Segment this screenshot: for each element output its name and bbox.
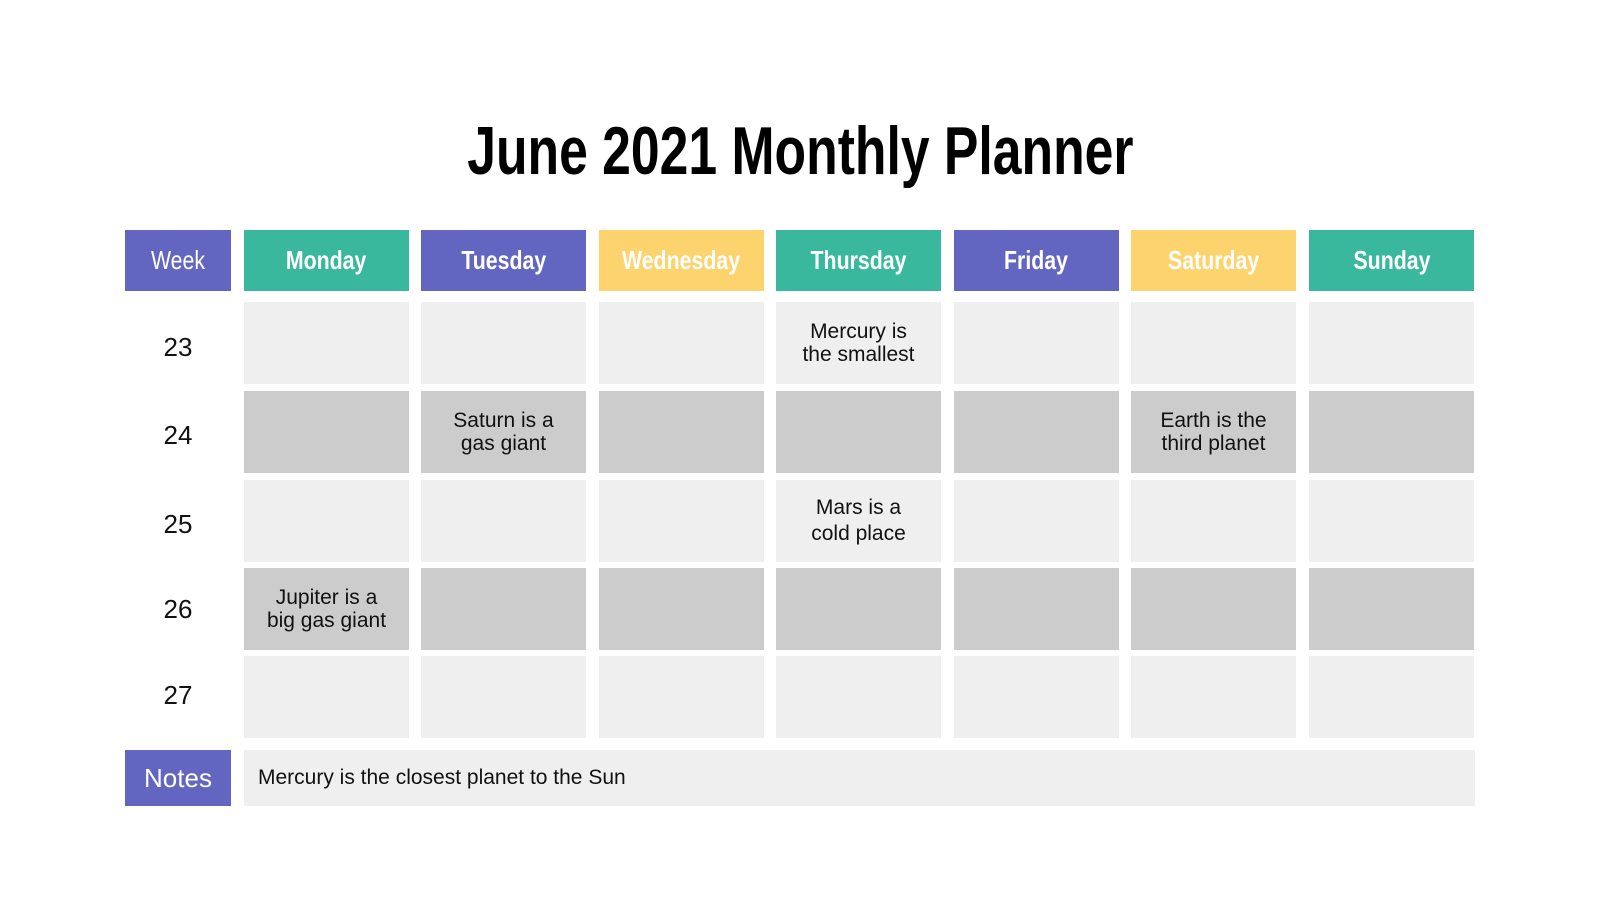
title: June 2021 Monthly Planner — [467, 113, 1133, 189]
cell: saturn: Saturn is a — [453, 409, 554, 432]
header: saturday — [1131, 230, 1296, 291]
cell: earth — [1131, 391, 1296, 473]
cell: earth: third planet — [1162, 432, 1265, 455]
notes label — [125, 750, 231, 806]
row 23 cells — [244, 302, 1474, 384]
header: monday — [244, 230, 409, 291]
header: tuesday — [421, 230, 586, 291]
notes text — [244, 750, 1475, 806]
row 25 cells — [244, 480, 1474, 562]
header: sunday — [1309, 230, 1474, 291]
header: tuesday: Tuesday — [461, 245, 546, 275]
cell: mercury: the smallest — [802, 343, 915, 366]
header: week — [125, 230, 231, 291]
header: thursday — [776, 230, 941, 291]
cell: mercury: Mercury is — [810, 320, 907, 343]
week 23 label: 23 — [164, 332, 192, 362]
header: sunday: Sunday — [1353, 245, 1430, 275]
week 27 label: 27 — [164, 680, 192, 710]
cell: saturn — [421, 391, 586, 473]
cell: earth: Earth is the — [1160, 409, 1267, 432]
week 24 label: 24 — [164, 420, 192, 450]
week 25 label: 25 — [164, 508, 192, 538]
cell: mars: cold place — [811, 522, 906, 545]
cell: jupiter: Jupiter is a — [276, 586, 377, 609]
cell: saturn: gas giant — [461, 432, 546, 455]
header: thursday: Thursday — [811, 245, 906, 275]
cell: mars — [776, 480, 941, 562]
header: saturday: Saturday — [1168, 245, 1259, 275]
week 26 label: 26 — [164, 594, 192, 624]
row 27 cells — [244, 656, 1474, 738]
cell: jupiter: big gas giant — [267, 609, 386, 632]
header: friday: Friday — [1005, 245, 1068, 275]
row 24 cells — [244, 391, 1474, 473]
notes label: Notes — [144, 762, 212, 792]
header: monday: Monday — [286, 245, 367, 275]
notes text: Mercury is the closest planet to the Sun — [258, 766, 626, 789]
cell: mars: Mars is a — [816, 496, 901, 519]
header: wednesday — [599, 230, 764, 291]
header: week: Week — [151, 245, 205, 275]
cell: jupiter — [244, 568, 409, 650]
header: wednesday: Wednesday — [622, 245, 741, 275]
row 26 cells — [244, 568, 1474, 650]
cell: mercury — [776, 302, 941, 384]
header: friday — [954, 230, 1119, 291]
